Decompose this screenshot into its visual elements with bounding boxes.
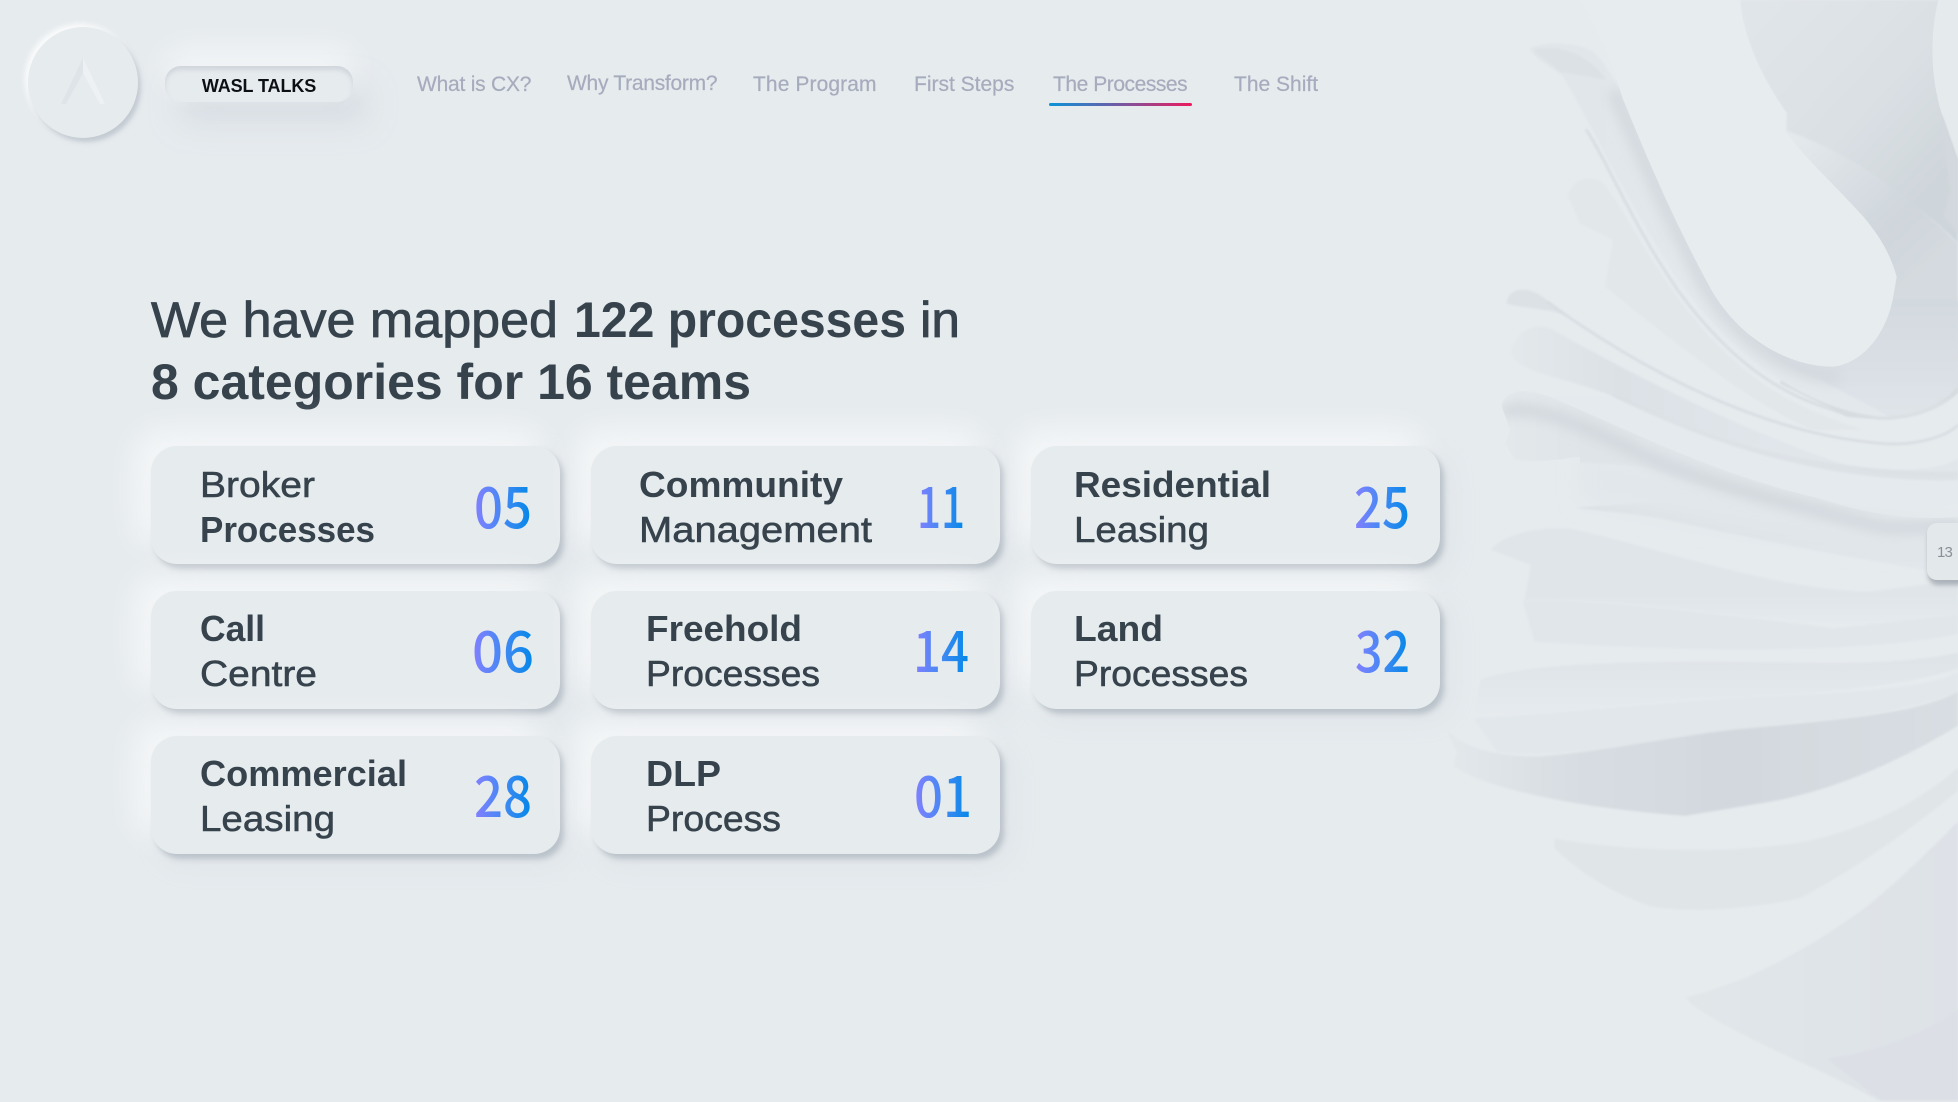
- shadow beside lobe: [1780, 130, 1958, 417]
- button: WASL TALKS: [165, 66, 353, 102]
- card: Broker Processes 05: 05: [474, 463, 532, 545]
- title: 122 processes: [574, 292, 906, 348]
- card: Residential Leasing 25: [1031, 446, 1440, 564]
- icon: logo chevron: [28, 27, 138, 138]
- card: Call Centre 06: 06: [472, 607, 534, 689]
- card: DLP Process 01: [591, 736, 1000, 854]
- light sheet under third: [1550, 397, 1958, 509]
- title: We have mapped: [151, 292, 558, 348]
- card: Freehold Processes 14: [591, 591, 1000, 709]
- navigation: The Shift: The Shift: [1234, 73, 1318, 96]
- upper folds: [1502, 0, 1958, 553]
- card: Commercial Leasing 28: [151, 736, 560, 854]
- card: Commercial Leasing 28: 28: [474, 752, 532, 834]
- card: DLP Process 01: DLP: [646, 753, 721, 794]
- main light lobe: [1580, 0, 1897, 367]
- card: Land Processes 32: Processes: [1074, 653, 1248, 694]
- card: Land Processes 32: Land: [1074, 608, 1163, 649]
- card: Commercial Leasing 28: Leasing: [200, 798, 335, 839]
- fourth sheet: [1502, 391, 1958, 528]
- background: flowing paper folds: [1502, 1, 1958, 1100]
- logo circle: [28, 27, 138, 138]
- fourth sheet lower fade: [1580, 453, 1958, 553]
- navigation: Why Transform?: Why Transform?: [567, 72, 717, 95]
- lower folds: [1447, 500, 1958, 1100]
- card: Broker Processes 05: Processes: [200, 509, 375, 550]
- card: Community Management 11: [591, 446, 1000, 564]
- title: 8 categories for 16 teams: [151, 354, 751, 410]
- card: Freehold Processes 14: Processes: [646, 653, 820, 694]
- flap fold: [1568, 179, 1863, 430]
- card: Community Management 11: 11: [917, 463, 965, 545]
- button: WASL TALKS: WASL TALKS: [202, 76, 316, 96]
- page number tab: 13: [1937, 544, 1952, 561]
- third sheet: [1512, 327, 1958, 475]
- card: Freehold Processes 14: 14: [913, 607, 969, 689]
- card: Land Processes 32: [1031, 591, 1440, 709]
- title: [150, 292, 960, 410]
- card: Broker Processes 05: [151, 446, 560, 564]
- card: Community Management 11: Management: [639, 509, 872, 550]
- card: Land Processes 32: 32: [1355, 607, 1410, 689]
- navigation: active underline: [1049, 103, 1192, 106]
- card: Community Management 11: Community: [639, 464, 843, 505]
- card: DLP Process 01: Process: [646, 798, 781, 839]
- page number tab: [1927, 523, 1958, 580]
- ridge line: [1586, 129, 1958, 418]
- second ridge: [1507, 290, 1567, 315]
- navigation: The Processes: The Processes: [1053, 73, 1187, 96]
- first fold: [1530, 44, 1897, 420]
- card: Call Centre 06: Call: [200, 608, 265, 649]
- card: Residential Leasing 25: Residential: [1074, 464, 1271, 505]
- card: DLP Process 01: 01: [914, 752, 972, 834]
- card: Freehold Processes 14: Freehold: [646, 608, 802, 649]
- title: in: [920, 292, 960, 348]
- card: Broker Processes 05: Broker: [200, 464, 315, 505]
- card: Residential Leasing 25: 25: [1354, 463, 1410, 545]
- navigation: First Steps: First Steps: [914, 73, 1014, 96]
- card: Residential Leasing 25: Leasing: [1074, 509, 1209, 550]
- navigation: What is CX?: What is CX?: [417, 73, 531, 96]
- navigation: The Program: The Program: [753, 73, 877, 96]
- card: Call Centre 06: Centre: [200, 653, 317, 694]
- card: Call Centre 06: [151, 591, 560, 709]
- card: Commercial Leasing 28: Commercial: [200, 753, 407, 794]
- top form: [1740, 0, 1958, 243]
